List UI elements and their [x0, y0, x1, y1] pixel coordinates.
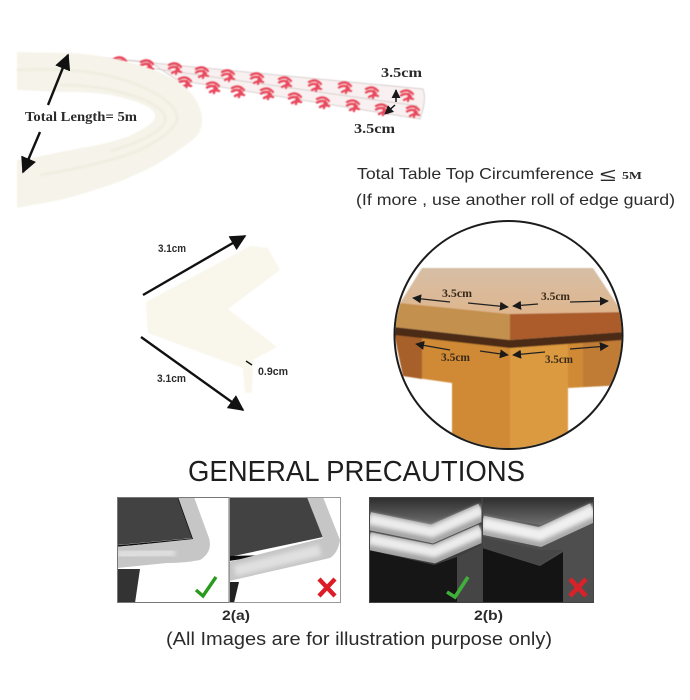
photo panel 2(b) wrong — [482, 497, 594, 603]
photo panel 2(a) wrong — [229, 497, 341, 603]
heading: GENERAL PRECAUTIONS — [188, 456, 525, 488]
table top surface — [400, 268, 622, 314]
arrow: tape height — [395, 90, 397, 102]
label: top edge: 3.1cm — [158, 243, 186, 255]
value 5M: 5M — [622, 170, 643, 182]
icon: green check — [447, 577, 468, 597]
label: tape width: 3.5cm — [354, 122, 395, 137]
adhesive tape strip — [70, 55, 424, 119]
right edge — [510, 312, 623, 340]
circular table corner illustration — [394, 221, 623, 456]
dimension label: top right: 3.5cm — [541, 291, 570, 303]
note line 1: Total Table Top Circumference — [357, 166, 594, 183]
label: thickness: 0.9cm — [258, 366, 288, 378]
icon: red cross — [570, 579, 586, 596]
apron and leg — [396, 337, 610, 448]
label: tape height: 3.5cm — [381, 66, 422, 81]
icon: green check — [196, 577, 216, 596]
L-shaped guard — [146, 246, 280, 393]
apron right shade — [583, 340, 621, 387]
dimension label: bottom right: 3.5cm — [545, 354, 573, 366]
left edge — [394, 303, 510, 340]
shadow band — [394, 327, 623, 348]
circle outline — [394, 221, 622, 449]
apron left shade — [394, 333, 422, 379]
arrow: bottom edge — [141, 337, 243, 410]
thickness tick — [246, 361, 252, 365]
photo panel 2(b) correct — [369, 497, 482, 603]
product roll: edge guard with adhesive tape — [17, 52, 424, 208]
arrow: tape width — [385, 105, 395, 114]
illustration disclaimer: (All Images are for illustration purpose only) — [166, 628, 552, 649]
label: bottom edge: 3.1cm — [157, 373, 186, 385]
wood table — [394, 268, 623, 456]
leg right face — [510, 342, 568, 456]
arrow: total length down — [23, 132, 40, 172]
dimension label: bottom left: 3.5cm — [441, 352, 470, 364]
label 2(b): 2(b) — [474, 607, 503, 623]
dimension label: top left: 3.5cm — [442, 288, 472, 300]
less-than-or-equal symbol: ≤ — [600, 165, 616, 186]
arrow: top edge — [143, 236, 245, 295]
photo panel 2(a) correct — [117, 497, 229, 603]
icon: red cross — [319, 579, 335, 596]
coiled guard body — [17, 52, 202, 208]
corner guard piece with dimensions — [141, 236, 288, 410]
label: total length: Total Length= 5m — [25, 109, 138, 124]
arrow: total length up — [48, 55, 68, 105]
note line 2: (If more , use another roll of edge guard) — [356, 192, 675, 209]
circumference note — [356, 165, 675, 209]
label 2(a): 2(a) — [222, 607, 250, 623]
dimension arrows — [413, 298, 608, 355]
guard ridges — [17, 69, 177, 175]
